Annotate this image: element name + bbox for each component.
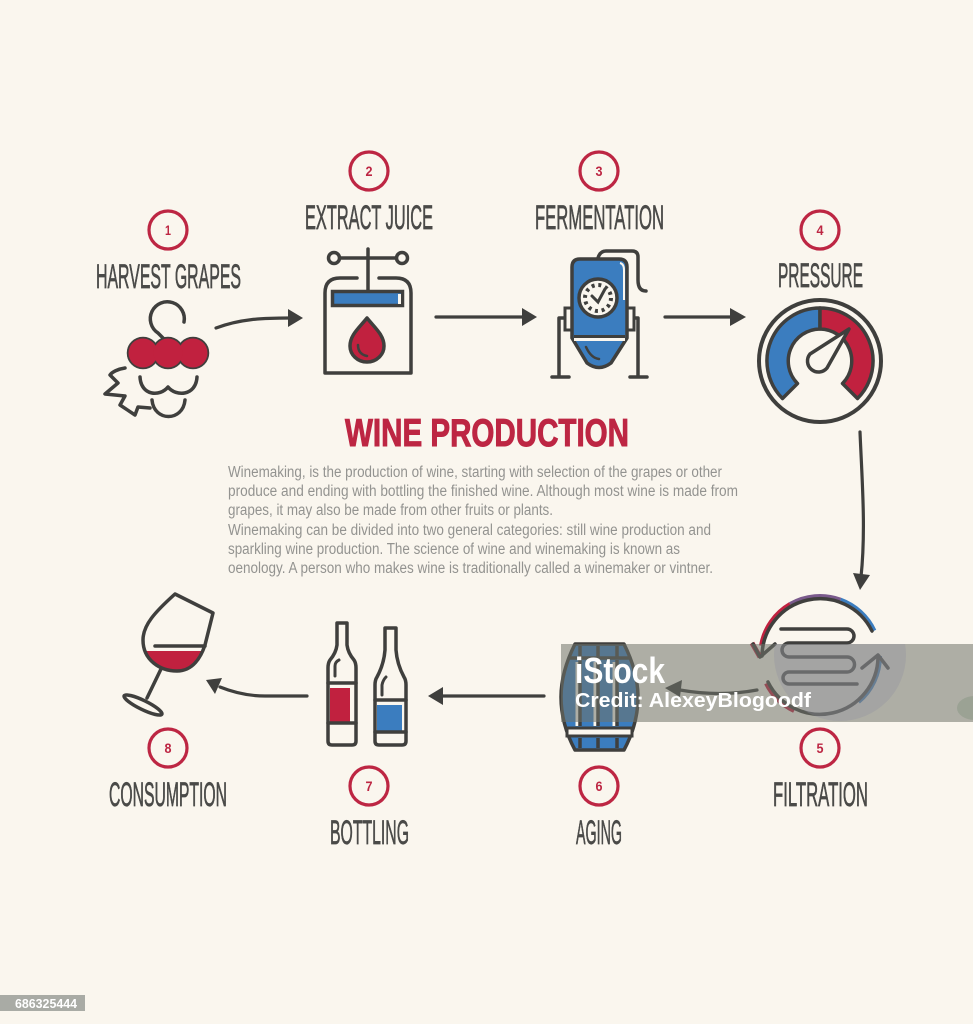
number badge 1 — [149, 211, 187, 249]
icon: filtration cycle — [752, 596, 888, 714]
watermark band — [561, 644, 973, 722]
icon: pressure gauge — [759, 300, 881, 422]
step 7: bottling — [328, 623, 409, 852]
description text: Winemaking, is the production of wine, starting with selection of the grapes or other — [228, 464, 722, 481]
icon: wine press — [325, 249, 411, 373]
step 8: consumption — [109, 594, 227, 814]
description text: oenology. A person who makes wine is traditionally called a winemaker or vintner. — [228, 560, 713, 577]
icon: wine barrel — [561, 644, 638, 750]
icon: wine glass — [122, 594, 213, 718]
number badge 8 — [149, 729, 187, 767]
description text: Winemaking can be divided into two general categories: still wine production and — [228, 522, 711, 539]
arrow: step 3 to step 4 — [665, 308, 746, 326]
step 1: harvest grapes — [96, 211, 241, 416]
text: HARVEST GRAPES — [96, 258, 241, 296]
number badge 6: 6 — [596, 778, 603, 794]
description text — [228, 464, 738, 577]
text: EXTRACT JUICE — [305, 199, 433, 237]
number badge 6 — [580, 767, 618, 805]
text: CONSUMPTION — [109, 776, 227, 814]
step 5: filtration: FILTRATION — [773, 776, 868, 814]
step 3: fermentation — [535, 152, 664, 377]
title: WINE PRODUCTION — [345, 412, 629, 455]
arrow: step 7 to step 8 — [206, 678, 307, 696]
arrow: step 4 to step 5 — [853, 432, 870, 590]
image id badge: 686325444 — [15, 996, 78, 1011]
step 4: pressure: PRESSURE — [778, 257, 863, 295]
number badge 7: 7 — [366, 778, 373, 794]
number badge 8: 8 — [164, 740, 172, 756]
number badge 4: 4 — [816, 222, 824, 238]
arrow: step 6 to step 7 — [428, 687, 544, 705]
number badge 5 — [801, 729, 839, 767]
arrow: step 1 to step 2 — [216, 309, 303, 328]
text: FERMENTATION — [535, 199, 664, 237]
watermark logo text: iStock — [575, 650, 666, 691]
number badge 2: 2 — [366, 163, 373, 179]
icon: two bottles — [328, 623, 406, 745]
number badge 7 — [350, 767, 388, 805]
step 6: aging: AGING — [576, 814, 622, 852]
arrow: step 5 to step 6 — [665, 680, 757, 697]
step 6: aging — [561, 644, 638, 852]
number badge 5: 5 — [816, 740, 824, 756]
description text: grapes, it may also be made from other fruits or plants. — [228, 502, 553, 519]
step 4: pressure — [759, 211, 881, 422]
arrow: step 2 to step 3 — [436, 308, 537, 326]
number badge 3: 3 — [596, 163, 603, 179]
description text: sparkling wine production. The science of wine and winemaking is known as — [228, 541, 680, 558]
text: BOTTLING — [330, 814, 409, 852]
icon: fermentation tank — [552, 251, 647, 377]
watermark credit text: Credit: AlexeyBlogoodf — [575, 690, 811, 712]
icon: grapes — [105, 302, 208, 416]
number badge 2 — [350, 152, 388, 190]
number badge 4 — [801, 211, 839, 249]
step 5: filtration — [752, 596, 888, 814]
step 2: extract juice — [305, 152, 433, 373]
description text: produce and ending with bottling the finished wine. Although most wine is made from — [228, 483, 738, 500]
number badge 1: 1 — [165, 222, 171, 238]
number badge 3 — [580, 152, 618, 190]
